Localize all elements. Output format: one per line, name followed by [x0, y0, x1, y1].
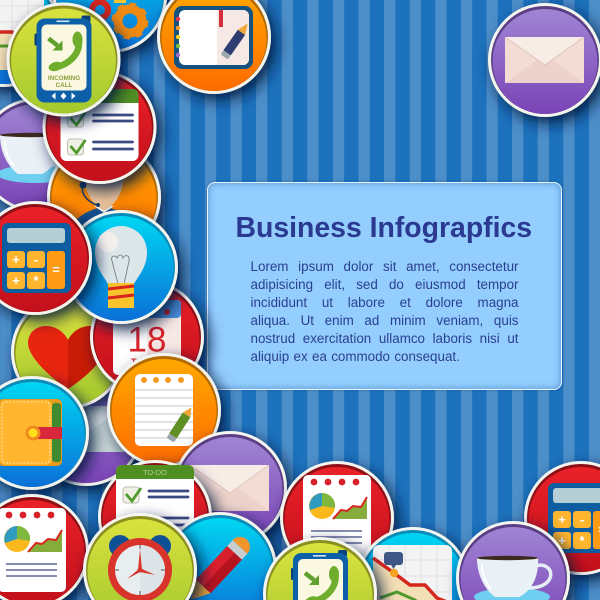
icon: support agent: [68, 173, 140, 233]
badge: purple cup, left: [0, 98, 93, 212]
icon: light bulb: [95, 226, 147, 308]
icon: coffee cup: [474, 556, 551, 600]
icon: heart: [28, 326, 108, 389]
calculator key labels: -: [580, 512, 584, 527]
date number: 18: [128, 320, 166, 360]
badge: grid chart, top left: [0, 0, 61, 87]
badge: purple envelope, partly hidden: [29, 372, 143, 486]
icon: line chart: [373, 545, 452, 600]
icon: envelope: [505, 37, 584, 83]
text block: lorem ipsum body: [250, 258, 518, 364]
label: incoming call: CALL: [56, 82, 73, 89]
badge: blue line chart, bottom: [356, 527, 470, 600]
badge: green alarm clock: [83, 513, 197, 600]
text block: lorem ipsum body: adipisicing elit, sed do eiusmod tempor: [250, 276, 518, 292]
badge: orange notepad: [107, 353, 221, 467]
icon: wallet: [0, 399, 62, 466]
badge: blue pencil: [163, 512, 277, 600]
badge: red chart report, bottom centre: [280, 461, 394, 575]
icon: notepad and pencil: [135, 374, 195, 446]
icon: phone: [291, 550, 348, 600]
icon: to-do list: [116, 465, 194, 537]
badge: red to-do list, bottom: [98, 460, 212, 574]
text block: lorem ipsum body: incididunt ut labore et dolore magna: [250, 294, 518, 310]
text block: lorem ipsum body: Lorem ipsum dolor sit amet, consectetur: [250, 258, 518, 274]
icon: chart report: [0, 508, 66, 592]
icon: gears: [92, 0, 146, 38]
icon: calendar: T: [131, 357, 137, 367]
badge: orange support agent: [47, 140, 161, 254]
calculator key labels: [12, 252, 60, 288]
badge: red to-do list: [42, 70, 156, 184]
icon: calculator: [2, 223, 71, 293]
calculator key labels: +: [558, 512, 566, 527]
calculator key labels: *: [33, 273, 39, 288]
calculator key labels: =: [52, 262, 60, 277]
text block: lorem ipsum body: aliquip ex ea commodo consequat.: [250, 348, 460, 364]
badge: red calculator: [0, 201, 92, 315]
label: incoming call: [48, 75, 80, 89]
icon: calendar: [113, 300, 181, 375]
icon: chart report: [303, 475, 371, 559]
badge: blue wallet: [0, 376, 89, 490]
calculator key labels: *: [579, 533, 585, 548]
heading: Business Infograpfics: [236, 212, 532, 244]
icon: envelope, tinted: [46, 406, 125, 452]
text block: lorem ipsum body: nostrud exercitation ullamco laboris nisi ut: [250, 330, 518, 346]
icon: envelope: [190, 465, 269, 511]
calculator key labels: +: [12, 273, 20, 288]
icon: coffee cup: [0, 133, 74, 183]
calculator key labels: +: [12, 252, 20, 267]
badge: purple envelope, top right: [488, 3, 600, 117]
icon: alarm clock: [108, 535, 172, 600]
badge: orange notebook: [157, 0, 271, 94]
icon: to-do list: [60, 89, 138, 161]
badge: green incoming call: [6, 2, 120, 116]
badge: green heart: [11, 295, 125, 409]
icon: notebook and pencil: [174, 6, 253, 69]
calculator key labels: -: [34, 252, 38, 267]
badge: red calculator, right: [524, 461, 600, 575]
label: to-do: TO-DO: [143, 468, 167, 477]
badge: red chart report, bottom left: [0, 494, 89, 600]
badge: blue light bulb: [64, 210, 178, 324]
icon: pencil: [184, 533, 254, 600]
badge: purple envelope, bottom centre: [173, 431, 287, 545]
badge: gears: [53, 0, 167, 53]
badge: green phone, bottom: [263, 537, 377, 600]
panel: business infographics text box: [207, 182, 562, 390]
badge: purple cup, bottom right: [456, 521, 570, 600]
icon: phone: [34, 16, 92, 102]
badge: red calendar: [90, 280, 204, 394]
label: incoming call: INCOMING: [48, 75, 80, 82]
text block: lorem ipsum body: aliqua. Ut enim ad minim veniam, quis: [250, 312, 518, 328]
calculator key labels: +: [558, 533, 566, 548]
icon: calculator: [548, 483, 600, 553]
calculator key labels: [558, 512, 600, 548]
icon: grid chart: [0, 0, 44, 70]
